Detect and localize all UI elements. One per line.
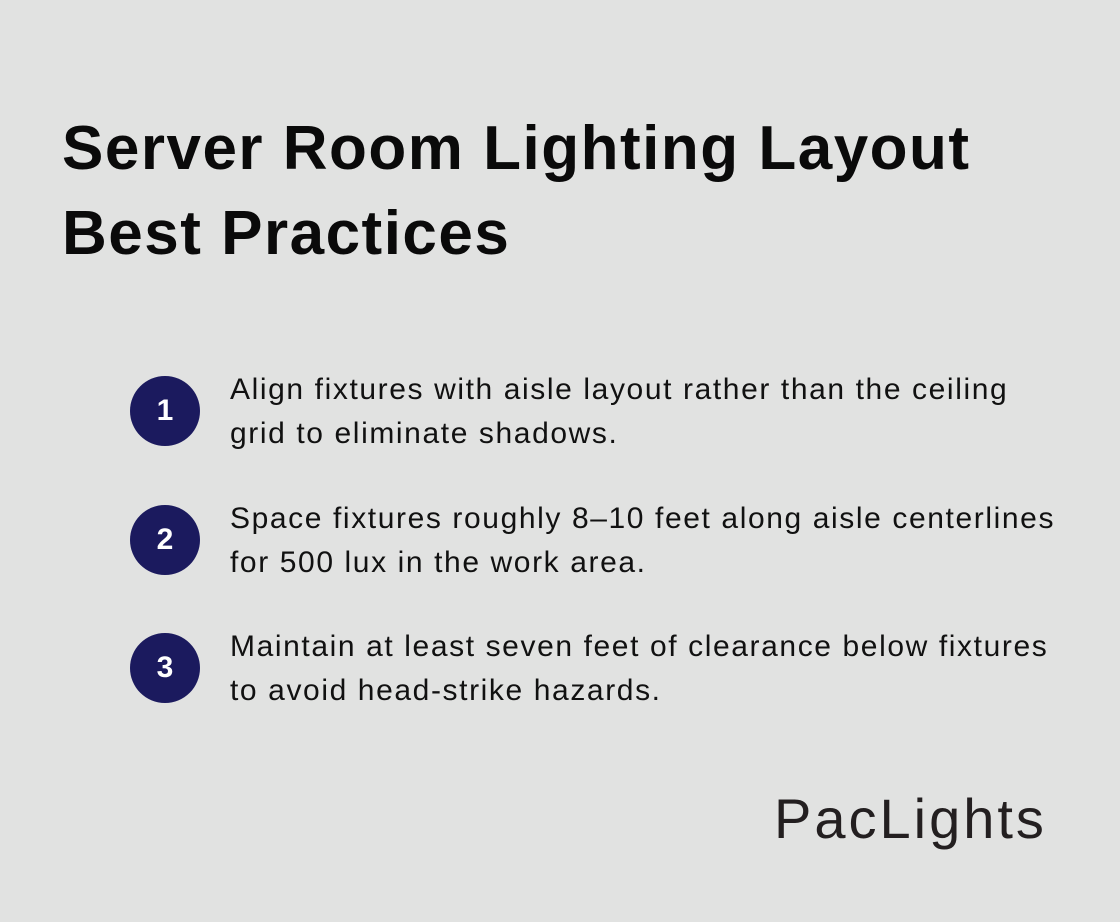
badge 1: 1 [157, 394, 173, 427]
badge 1 [130, 376, 200, 446]
text 3: to avoid head-strike hazards. [230, 674, 662, 707]
badge 2 [130, 505, 200, 575]
badge 3 [130, 633, 200, 703]
text 1: Align fixtures with aisle layout rather than the ceiling [230, 373, 1008, 406]
text 3 [230, 630, 1048, 707]
text 1: grid to eliminate shadows. [230, 417, 618, 450]
badge 2: 2 [157, 523, 173, 556]
item 3 [130, 630, 1048, 707]
text 2: for 500 lux in the work area. [230, 546, 647, 579]
title: Server Room Lighting Layout [62, 114, 971, 183]
item 1 [130, 373, 1008, 450]
item 2 [130, 502, 1055, 579]
title: Best Practices [62, 199, 510, 268]
text 3: Maintain at least seven feet of clearance below fixtures [230, 630, 1048, 663]
text 2 [230, 502, 1055, 579]
text 2: Space fixtures roughly 8–10 feet along aisle centerlines [230, 502, 1055, 535]
title [62, 114, 971, 268]
badge 3: 3 [157, 651, 173, 684]
text 1 [230, 373, 1008, 450]
logo: PacLights [774, 787, 1047, 850]
